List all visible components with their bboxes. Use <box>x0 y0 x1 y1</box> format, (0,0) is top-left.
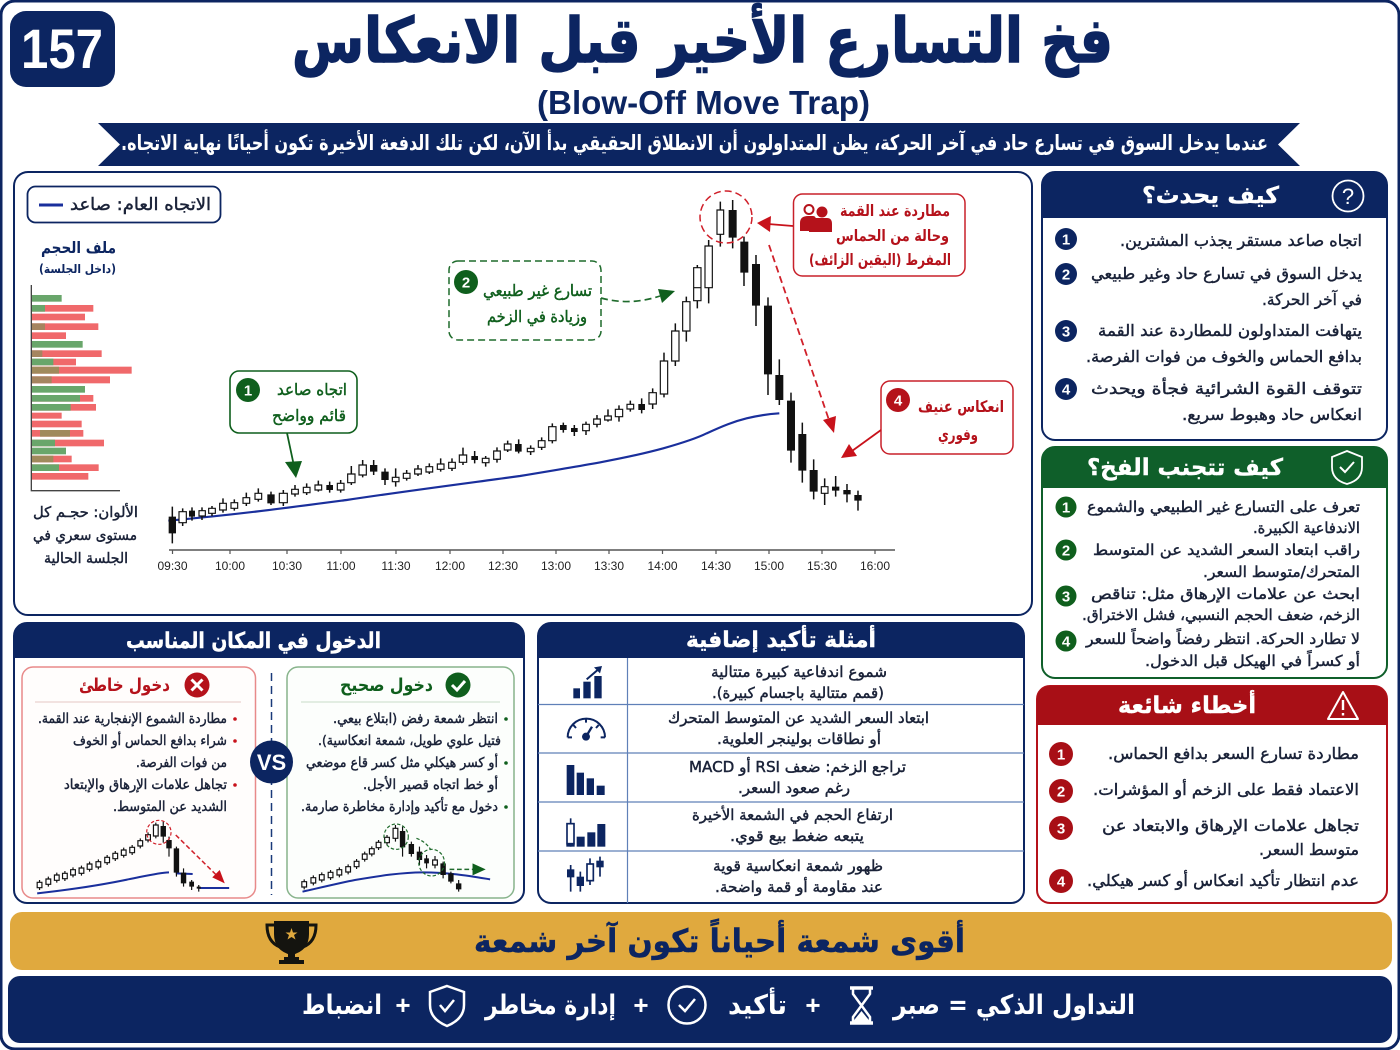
numbered tips: 2 <box>1062 542 1070 560</box>
time axis: 11:00 <box>326 559 356 573</box>
banner: smart trading formula: + <box>805 990 821 1020</box>
numbered steps: يدخل السوق في تسارع حاد وغير طبيعي <box>1091 264 1362 284</box>
banner: smart trading formula: + <box>395 990 411 1020</box>
sub-panel: correct entry: دخول صحيح <box>340 675 433 696</box>
legend: general trend: الاتجاه العام: صاعد <box>70 195 211 215</box>
panel: how it happens <box>1042 172 1387 440</box>
panel: how to avoid the trap <box>1042 447 1387 678</box>
sub-panel: wrong entry: دخول خاطئ <box>79 675 170 696</box>
numbered mistakes: 3 <box>1057 820 1065 838</box>
icon: rising bars <box>573 666 602 698</box>
time axis: 14:00 <box>647 559 678 573</box>
moving average line <box>168 413 779 521</box>
callout 2: abnormal acceleration: 2 <box>462 274 470 292</box>
icon: declining bars <box>567 765 605 795</box>
numbered mistakes: 4 <box>1057 874 1066 890</box>
numbered steps: في آخر الحركة. <box>1262 290 1362 310</box>
row: momentum decline <box>567 757 906 797</box>
ribbon: intro sentence <box>98 123 1300 166</box>
numbered tips: تعرف على التسارع غير الطبيعي والشموع <box>1087 498 1360 517</box>
heading: كيف تتجنب الفخ؟ <box>1087 455 1284 481</box>
banner: strongest candle: أقوى شمعة أحياناً تكون آخر شمعة <box>474 918 965 960</box>
time axis: 11:30 <box>381 559 411 573</box>
numbered mistakes: 1 <box>1057 746 1065 764</box>
numbered steps: يتهافت المتداولون للمطاردة عند القمة <box>1098 321 1362 341</box>
row: distance from moving average: أو نطاقات بولينجر العلوية. <box>717 729 881 748</box>
sub-panel: correct entry <box>287 667 514 898</box>
banner: smart trading formula <box>8 976 1392 1043</box>
panel: entering at the right place <box>14 623 524 903</box>
arrow: callout 4 to drop <box>841 430 881 458</box>
callout 1: clear uptrend: اتجاه صاعد <box>277 380 347 399</box>
icon: shield <box>1332 451 1362 484</box>
numbered tips: راقب ابتعاد السعر الشديد عن المتوسط <box>1093 541 1360 559</box>
callout 1: clear uptrend <box>230 371 357 433</box>
numbered tips: لا تطارد الحركة. انتظر رفضاً واضحاً للسعر <box>1085 628 1360 648</box>
icon: trophy <box>267 921 316 964</box>
callout 2: abnormal acceleration: وزيادة في الزخم <box>487 307 587 327</box>
time axis: 13:30 <box>594 559 624 573</box>
numbered mistakes: عدم انتظار تأكيد انعكاس أو كسر هيكلي. <box>1087 869 1359 891</box>
time axis: 13:00 <box>541 559 571 573</box>
numbered mistakes <box>1049 742 1359 893</box>
volume colour note: الجلسة الحالية <box>44 551 128 567</box>
numbered steps: اتجاه صاعد مستقر يجذب المشترين. <box>1120 231 1362 251</box>
arrow: callout 1 to trend <box>285 433 302 478</box>
heading: كيف يحدث؟ <box>1142 183 1280 209</box>
time axis: 10:00 <box>215 559 245 573</box>
row: volume spike: ارتفاع الحجم في الشمعة الأخيرة <box>692 805 893 825</box>
numbered tips: 4 <box>1062 634 1071 650</box>
icon: cross <box>184 672 210 698</box>
numbered steps <box>1055 228 1362 425</box>
volume profile heading: ملف الحجم <box>41 238 116 257</box>
banner: smart trading formula: تأكيد <box>728 987 787 1021</box>
callout 2: abnormal acceleration: تسارع غير طبيعي <box>483 281 592 301</box>
numbered mistakes: 2 <box>1057 784 1065 800</box>
numbered tips: ابحث عن علامات الإرهاق مثل: تناقص <box>1091 585 1360 603</box>
row: momentum decline: تراجع الزخم: ضعف RSI أو MACD <box>689 757 906 776</box>
row: distance from moving average <box>568 709 929 748</box>
row: strong reversal candle: عند مقاومة أو قمة واضحة. <box>715 877 883 896</box>
icon: people <box>800 205 832 232</box>
heading: أخطاء شائعة <box>1118 689 1256 719</box>
numbered steps: 4 <box>1062 382 1071 398</box>
banner: smart trading formula: انضباط <box>302 990 382 1021</box>
legend: general trend <box>28 186 220 222</box>
sub-panel: wrong entry <box>22 667 256 898</box>
mini chart: wrong entry <box>37 820 229 893</box>
numbered tips: أو كسراً في الهيكل قبل الدخول. <box>1145 650 1360 671</box>
callout 3: chasing at the top: مطاردة عند القمة <box>840 202 950 220</box>
subtitle: (Blow-Off Move Trap) <box>537 84 870 121</box>
row: consecutive impulsive candles <box>573 663 887 702</box>
panel: main candlestick chart <box>14 172 1032 615</box>
callout 1: clear uptrend: قائم وواضح <box>272 406 346 426</box>
sub-panel: wrong entry: شراء بدافع الحماس أو الخوف <box>73 731 227 749</box>
heading: الدخول في المكان المناسب <box>126 629 381 654</box>
icon: check circle <box>668 986 706 1024</box>
row: strong reversal candle: ظهور شمعة انعكاسية قوية <box>713 857 883 875</box>
numbered tips <box>1056 496 1360 671</box>
callout 3: chasing at the top: وحالة من الحماس <box>836 227 949 245</box>
row: distance from moving average: ابتعاد السعر الشديد عن المتوسط المتحرك <box>668 709 929 727</box>
callout 3: chasing at the top <box>794 194 965 276</box>
banner: smart trading formula: + <box>633 990 649 1020</box>
time axis: 15:30 <box>807 559 837 573</box>
sub-panel: correct entry: انتظر شمعة رفض (ابتلاع بيعي. <box>333 711 498 727</box>
row: consecutive impulsive candles: شموع اندفاعية كبيرة متتالية <box>711 663 887 681</box>
number badge: 157: 157 <box>21 17 103 80</box>
numbered mistakes: الاعتماد فقط على الزخم أو المؤشرات. <box>1093 779 1359 800</box>
icon: hourglass <box>850 988 873 1023</box>
banner: smart trading formula: إدارة مخاطر <box>483 990 616 1021</box>
icon: candle with volume <box>566 818 605 847</box>
chart: volume profile bars <box>31 285 132 491</box>
numbered steps: 3 <box>1062 324 1070 340</box>
time axis: 12:30 <box>488 559 518 573</box>
volume profile heading <box>39 238 116 276</box>
heading: أمثلة تأكيد إضافية <box>686 624 876 653</box>
peak circle <box>700 191 752 243</box>
panel: additional confirmation examples <box>538 623 1024 903</box>
time axis: 14:30 <box>701 559 731 573</box>
time axis: 15:00 <box>754 559 784 573</box>
sub-panel: correct entry: دخول مع تأكيد وإدارة مخاطرة صارمة. <box>301 797 498 815</box>
sub-panel: wrong entry: مطاردة الشموع الإنفجارية عند القمة. <box>38 711 227 727</box>
numbered tips: 1 <box>1062 500 1070 516</box>
sub-panel: wrong entry: الشديد عن المتوسط. <box>113 799 227 815</box>
icon: candlesticks <box>567 857 604 892</box>
numbered tips: الاندفاعية الكبيرة. <box>1253 519 1360 537</box>
time axis: 09:30 <box>157 559 188 573</box>
row: strong reversal candle <box>567 857 883 896</box>
time axis: 12:00 <box>435 559 465 573</box>
row: volume spike <box>566 805 893 847</box>
sub-panel: wrong entry: تجاهل علامات الإرهاق والإبتعاد <box>64 777 227 793</box>
arrow: dashed drop <box>769 245 836 433</box>
arrow: callout 2 to rally <box>601 289 675 303</box>
time axis: 10:30 <box>272 559 302 573</box>
numbered tips: 3 <box>1062 588 1070 606</box>
banner: smart trading formula: التداول الذكي = صبر <box>891 990 1135 1021</box>
volume profile heading: (داخل الجلسة) <box>39 262 116 276</box>
volume colour note <box>33 503 138 567</box>
callout 4: violent reversal: 4 <box>894 392 903 410</box>
volume colour note: الألوان: حجـم كل <box>33 503 138 521</box>
banner: strongest candle <box>10 912 1392 970</box>
sub-panel: correct entry: فتيل علوي طويل، شمعة انعكاسية). <box>318 733 501 749</box>
sub-panel: wrong entry: من فوات الفرصة. <box>136 755 227 771</box>
icon: question mark <box>1332 180 1364 212</box>
numbered tips: المتحرك/متوسط السعر. <box>1203 563 1360 581</box>
sub-panel: correct entry: أو كسر هيكلي مثل كسر قاع موضعي <box>306 753 498 771</box>
numbered steps: بدافع الحماس والخوف من فوات الفرصة. <box>1086 347 1362 367</box>
callout 3: chasing at the top: المفرط (اليقين الزائف) <box>809 251 951 269</box>
row: volume spike: يتبعه ضغط بيع قوي. <box>730 827 864 846</box>
sub-panel: correct entry: أو خط اتجاه قصير الأجل. <box>363 775 498 793</box>
callout 4: violent reversal: انعكاس عنيف <box>918 397 1004 416</box>
numbered steps: 2 <box>1062 266 1070 284</box>
numbered tips: الزخم، ضعف الحجم النسبي، فشل الاختراق. <box>1082 606 1360 625</box>
callout 2: abnormal acceleration <box>449 261 601 340</box>
time axis: 16:00 <box>860 559 890 573</box>
row: consecutive impulsive candles: (قمم متتالية باجسام كبيرة). <box>712 684 884 702</box>
numbered steps: انعكاس حاد وهبوط سريع. <box>1182 405 1362 425</box>
volume colour note: مستوى سعري في <box>33 528 137 544</box>
icon: question mark: ? <box>1342 184 1354 209</box>
candlesticks <box>169 200 862 543</box>
callout 4: violent reversal <box>881 381 1013 454</box>
row: momentum decline: رغم صعود السعر. <box>738 779 850 797</box>
vs divider <box>250 673 293 895</box>
callout 1: clear uptrend: 1 <box>244 382 252 400</box>
arrow: callout 3 to peak <box>757 216 793 232</box>
icon: shield <box>430 986 464 1026</box>
callout 4: violent reversal: وفوري <box>938 425 978 445</box>
vs divider: VS <box>257 750 286 775</box>
numbered steps: 1 <box>1062 232 1070 248</box>
icon: warning <box>1328 692 1358 719</box>
numbered mistakes: متوسط السعر. <box>1259 840 1359 860</box>
title: فخ التسارع الأخير قبل الانعكاس <box>292 3 1113 77</box>
numbered steps: تتوقف القوة الشرائية فجأة ويحدث <box>1091 377 1362 399</box>
icon: gauge <box>568 719 605 740</box>
numbered mistakes: مطاردة تسارع السعر بدافع الحماس. <box>1108 744 1359 764</box>
time axis <box>157 550 895 573</box>
mini chart: correct entry <box>302 824 490 892</box>
numbered mistakes: تجاهل علامات الإرهاق والابتعاد عن <box>1102 816 1359 836</box>
icon: check <box>446 672 470 698</box>
panel: common mistakes <box>1037 686 1387 903</box>
